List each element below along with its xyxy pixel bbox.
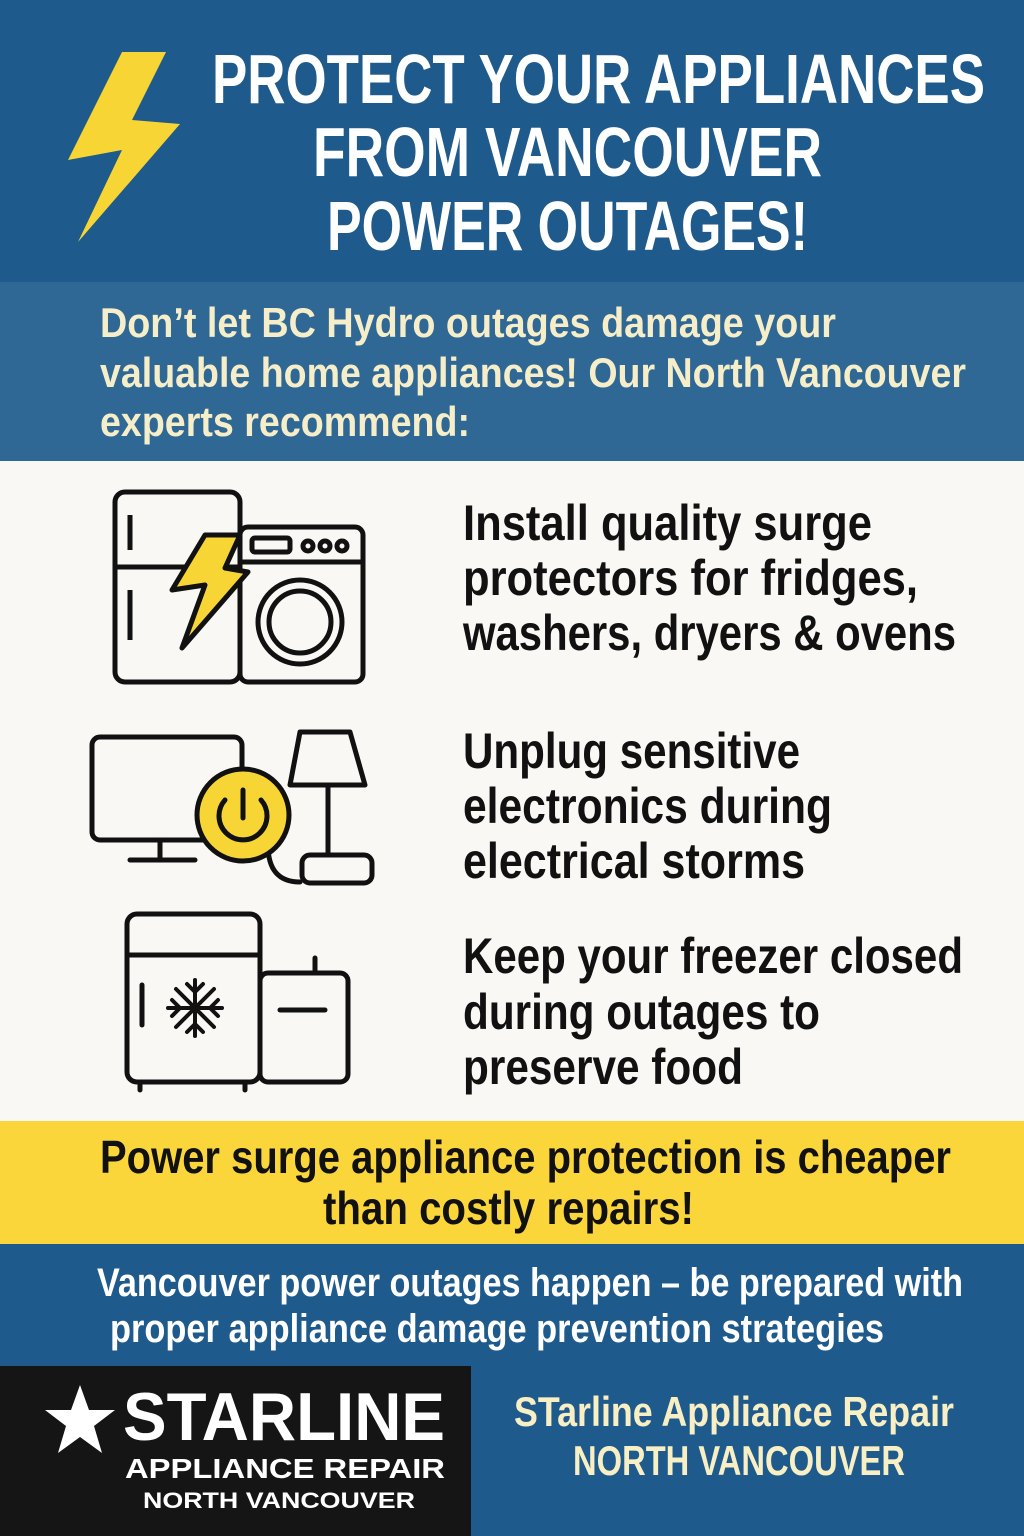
callout text bbox=[100, 1131, 951, 1234]
tip 2 text: electrical storms bbox=[463, 833, 805, 889]
header band bbox=[0, 0, 1024, 282]
company name text bbox=[514, 1388, 954, 1484]
tips panel bbox=[0, 461, 1024, 1121]
intro text: experts recommend: bbox=[100, 398, 470, 445]
tip 1 text bbox=[462, 495, 956, 661]
title: POWER OUTAGES! bbox=[327, 187, 808, 265]
icon: freezer bbox=[127, 914, 348, 1090]
company name text: NORTH VANCOUVER bbox=[573, 1437, 905, 1484]
prepared text bbox=[97, 1261, 963, 1351]
bottom blue band bbox=[0, 1244, 1024, 1536]
tip 3 text: preserve food bbox=[463, 1039, 743, 1095]
tip 3 text bbox=[463, 928, 963, 1095]
tip 2 text bbox=[463, 723, 832, 889]
icon: fridge and washer with bolt bbox=[115, 492, 363, 682]
intro text: Don’t let BC Hydro outages damage your bbox=[100, 299, 836, 346]
tip 3 text: during outages to bbox=[463, 984, 820, 1040]
tip 1 text: protectors for fridges, bbox=[463, 550, 918, 606]
logo block bbox=[0, 1366, 471, 1536]
intro band bbox=[0, 282, 1024, 461]
tip 2 text: electronics during bbox=[463, 778, 832, 834]
icon: lightning bolt bbox=[68, 52, 180, 242]
logo block: NORTH VANCOUVER bbox=[143, 1488, 415, 1513]
tip 1 text: Install quality surge bbox=[463, 495, 872, 551]
callout band bbox=[0, 1121, 1024, 1244]
intro text bbox=[100, 299, 966, 445]
icon: monitor, power button, lamp bbox=[92, 732, 372, 883]
title: FROM VANCOUVER bbox=[313, 113, 822, 191]
logo block: APPLIANCE REPAIR bbox=[125, 1453, 445, 1484]
tip 2 text: Unplug sensitive bbox=[463, 723, 800, 779]
company name text: STarline Appliance Repair bbox=[514, 1388, 954, 1435]
logo block: STARLINE bbox=[123, 1379, 445, 1455]
prepared text: proper appliance damage prevention strategies bbox=[110, 1307, 884, 1351]
title bbox=[212, 40, 985, 265]
callout text: than costly repairs! bbox=[323, 1182, 694, 1234]
